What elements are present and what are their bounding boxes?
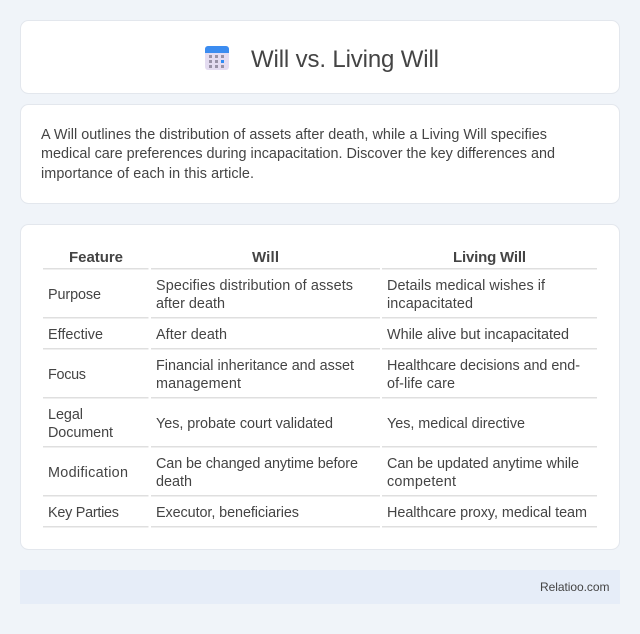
row: Purpose: Specifies distribution of assets bbox=[156, 278, 353, 294]
table header row: Living Will bbox=[453, 249, 526, 266]
row: Effective: After death bbox=[156, 327, 227, 343]
row: Purpose: incapacitated bbox=[387, 296, 473, 312]
row: Modification: Can be updated anytime while bbox=[387, 456, 579, 472]
table header row: Will bbox=[252, 249, 279, 266]
row: Legal Document: Document bbox=[48, 425, 113, 441]
row: Legal Document: Yes, medical directive bbox=[387, 416, 525, 432]
row: Modification: Modification bbox=[48, 465, 128, 481]
row: Focus: Focus bbox=[48, 367, 86, 383]
panel: table bbox=[20, 224, 620, 550]
row: Legal Document bbox=[48, 407, 525, 441]
footer bar bbox=[20, 570, 620, 604]
row: Purpose: Purpose bbox=[48, 287, 101, 303]
row: Modification: Can be changed anytime before bbox=[156, 456, 358, 472]
row: Modification: death bbox=[156, 474, 192, 490]
row: Purpose: after death bbox=[156, 296, 225, 312]
row: Legal Document: Legal bbox=[48, 407, 83, 423]
row: Key Parties: Healthcare proxy, medical team bbox=[387, 505, 587, 521]
table header row: Feature bbox=[69, 249, 123, 266]
row: Focus: Healthcare decisions and end- bbox=[387, 358, 580, 374]
panel: header bbox=[20, 20, 620, 94]
footer credit: Relatioo.com bbox=[540, 580, 610, 594]
row: Modification bbox=[48, 456, 579, 490]
row: Effective bbox=[48, 327, 569, 343]
row: Key Parties: Key Parties bbox=[48, 505, 119, 521]
intro text: A Will outlines the distribution of assets after death, while a Living Will specifies bbox=[41, 127, 547, 143]
row: Key Parties: Executor, beneficiaries bbox=[156, 505, 299, 521]
intro text bbox=[41, 127, 555, 182]
row: Focus: of-life care bbox=[387, 376, 455, 392]
row: Focus: management bbox=[156, 376, 241, 392]
intro text: importance of each in this article. bbox=[41, 166, 254, 182]
row: Effective: Effective bbox=[48, 327, 103, 343]
table header row bbox=[69, 249, 526, 266]
row: Modification: competent bbox=[387, 474, 456, 490]
icon: calendar bbox=[205, 46, 229, 70]
intro text: medical care preferences during incapacitation. Discover the key differences and bbox=[41, 146, 555, 162]
title: Will vs. Living Will bbox=[251, 46, 439, 73]
panel: intro bbox=[20, 104, 620, 204]
row: Focus bbox=[48, 358, 580, 392]
row: Purpose: Details medical wishes if bbox=[387, 278, 546, 294]
row: Legal Document: Yes, probate court validated bbox=[156, 416, 333, 432]
row: Effective: While alive but incapacitated bbox=[387, 327, 569, 343]
row: Purpose bbox=[48, 278, 546, 312]
row: Key Parties bbox=[48, 505, 587, 521]
row: Focus: Financial inheritance and asset bbox=[156, 358, 354, 374]
